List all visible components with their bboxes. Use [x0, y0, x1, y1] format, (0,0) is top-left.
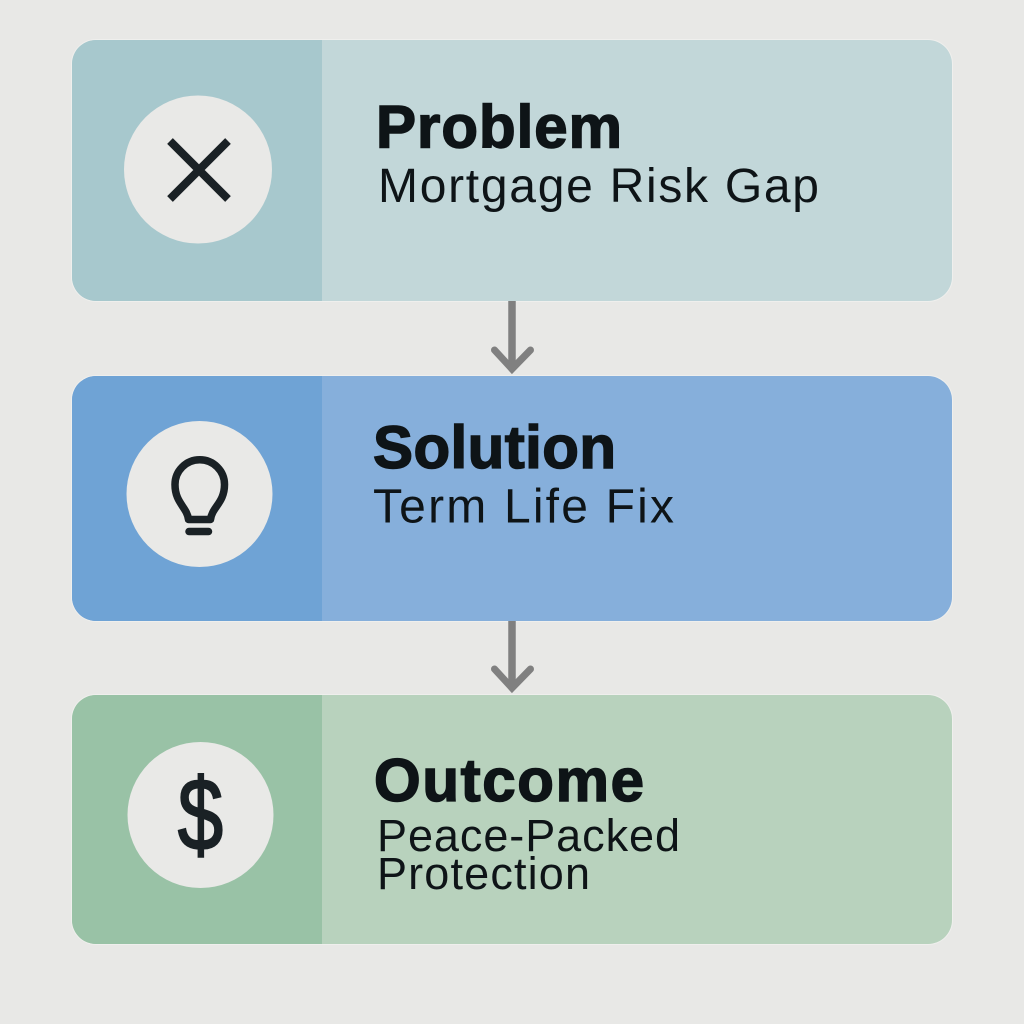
- panel: solution: [71, 375, 953, 622]
- panel: outcome: [71, 694, 953, 945]
- text: peace-packed protection: Protection: [377, 848, 590, 899]
- text: peace-packed protection: Peace-Packed: [377, 810, 680, 861]
- infographic: problem to outcome flow: [72, 40, 952, 944]
- icon: cross in circle: [124, 96, 272, 244]
- arrow: problem to solution: [494, 301, 530, 370]
- heading: outcome: Outcome: [374, 747, 644, 814]
- heading: problem: Problem: [376, 94, 622, 160]
- text: peace-packed protection: [377, 810, 680, 899]
- text: mortgage risk gap: Mortgage Risk Gap: [378, 160, 819, 213]
- arrow: solution to outcome: [494, 621, 530, 689]
- panel: problem: [71, 39, 953, 302]
- icon: light bulb in circle: [126, 421, 272, 567]
- icon: dollar sign in circle: $: [178, 757, 223, 872]
- heading: solution: Solution: [373, 414, 616, 481]
- icon: dollar sign in circle: [128, 742, 274, 888]
- text: term life fix: Term Life Fix: [373, 480, 674, 534]
